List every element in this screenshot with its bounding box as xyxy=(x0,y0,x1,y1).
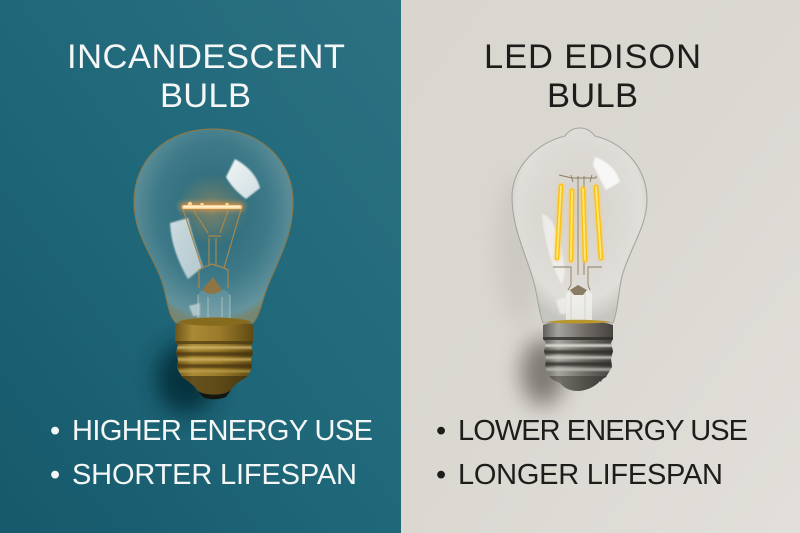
list: LED benefits: LONGER LIFESPAN xyxy=(458,459,723,491)
glass stem xyxy=(566,289,592,320)
glass soft shadow xyxy=(496,175,544,325)
filament supports xyxy=(553,175,602,320)
bulb shadow xyxy=(156,342,216,414)
heading: LED Edison bulb: LED EDISON xyxy=(484,38,701,76)
icon: LED Edison light bulb xyxy=(496,128,647,406)
list: LED benefits: • xyxy=(436,459,446,491)
panel: LED background xyxy=(401,0,800,533)
list: LED benefits: LOWER ENERGY USE xyxy=(458,415,748,447)
heading: incandescent bulb xyxy=(67,38,345,115)
heading: LED Edison bulb xyxy=(484,38,701,115)
glass highlights xyxy=(170,159,260,316)
list: incandescent drawbacks: • xyxy=(50,415,60,447)
heading: incandescent bulb: BULB xyxy=(160,77,251,115)
icon: incandescent light bulb xyxy=(134,129,293,414)
glass envelope xyxy=(512,128,647,323)
list: incandescent drawbacks: HIGHER ENERGY USE xyxy=(72,415,373,447)
filament supports xyxy=(182,206,242,320)
list: LED benefits xyxy=(436,415,748,491)
filament glow xyxy=(176,174,248,246)
heading: incandescent bulb: INCANDESCENT xyxy=(67,38,345,76)
list: incandescent drawbacks xyxy=(50,415,373,491)
glass envelope xyxy=(134,129,293,323)
brass base xyxy=(175,324,253,394)
glowing LED filaments xyxy=(557,186,601,260)
list: incandescent drawbacks: SHORTER LIFESPAN xyxy=(72,459,357,491)
list: incandescent drawbacks: • xyxy=(50,459,60,491)
panel: incandescent background xyxy=(0,0,401,533)
glowing filament xyxy=(180,203,244,210)
list: LED benefits: • xyxy=(436,415,446,447)
heading: LED Edison bulb: BULB xyxy=(547,77,638,115)
glass stem xyxy=(198,288,230,320)
glass highlights xyxy=(542,157,620,314)
bulb shadow xyxy=(521,338,565,406)
metal base xyxy=(543,322,613,391)
